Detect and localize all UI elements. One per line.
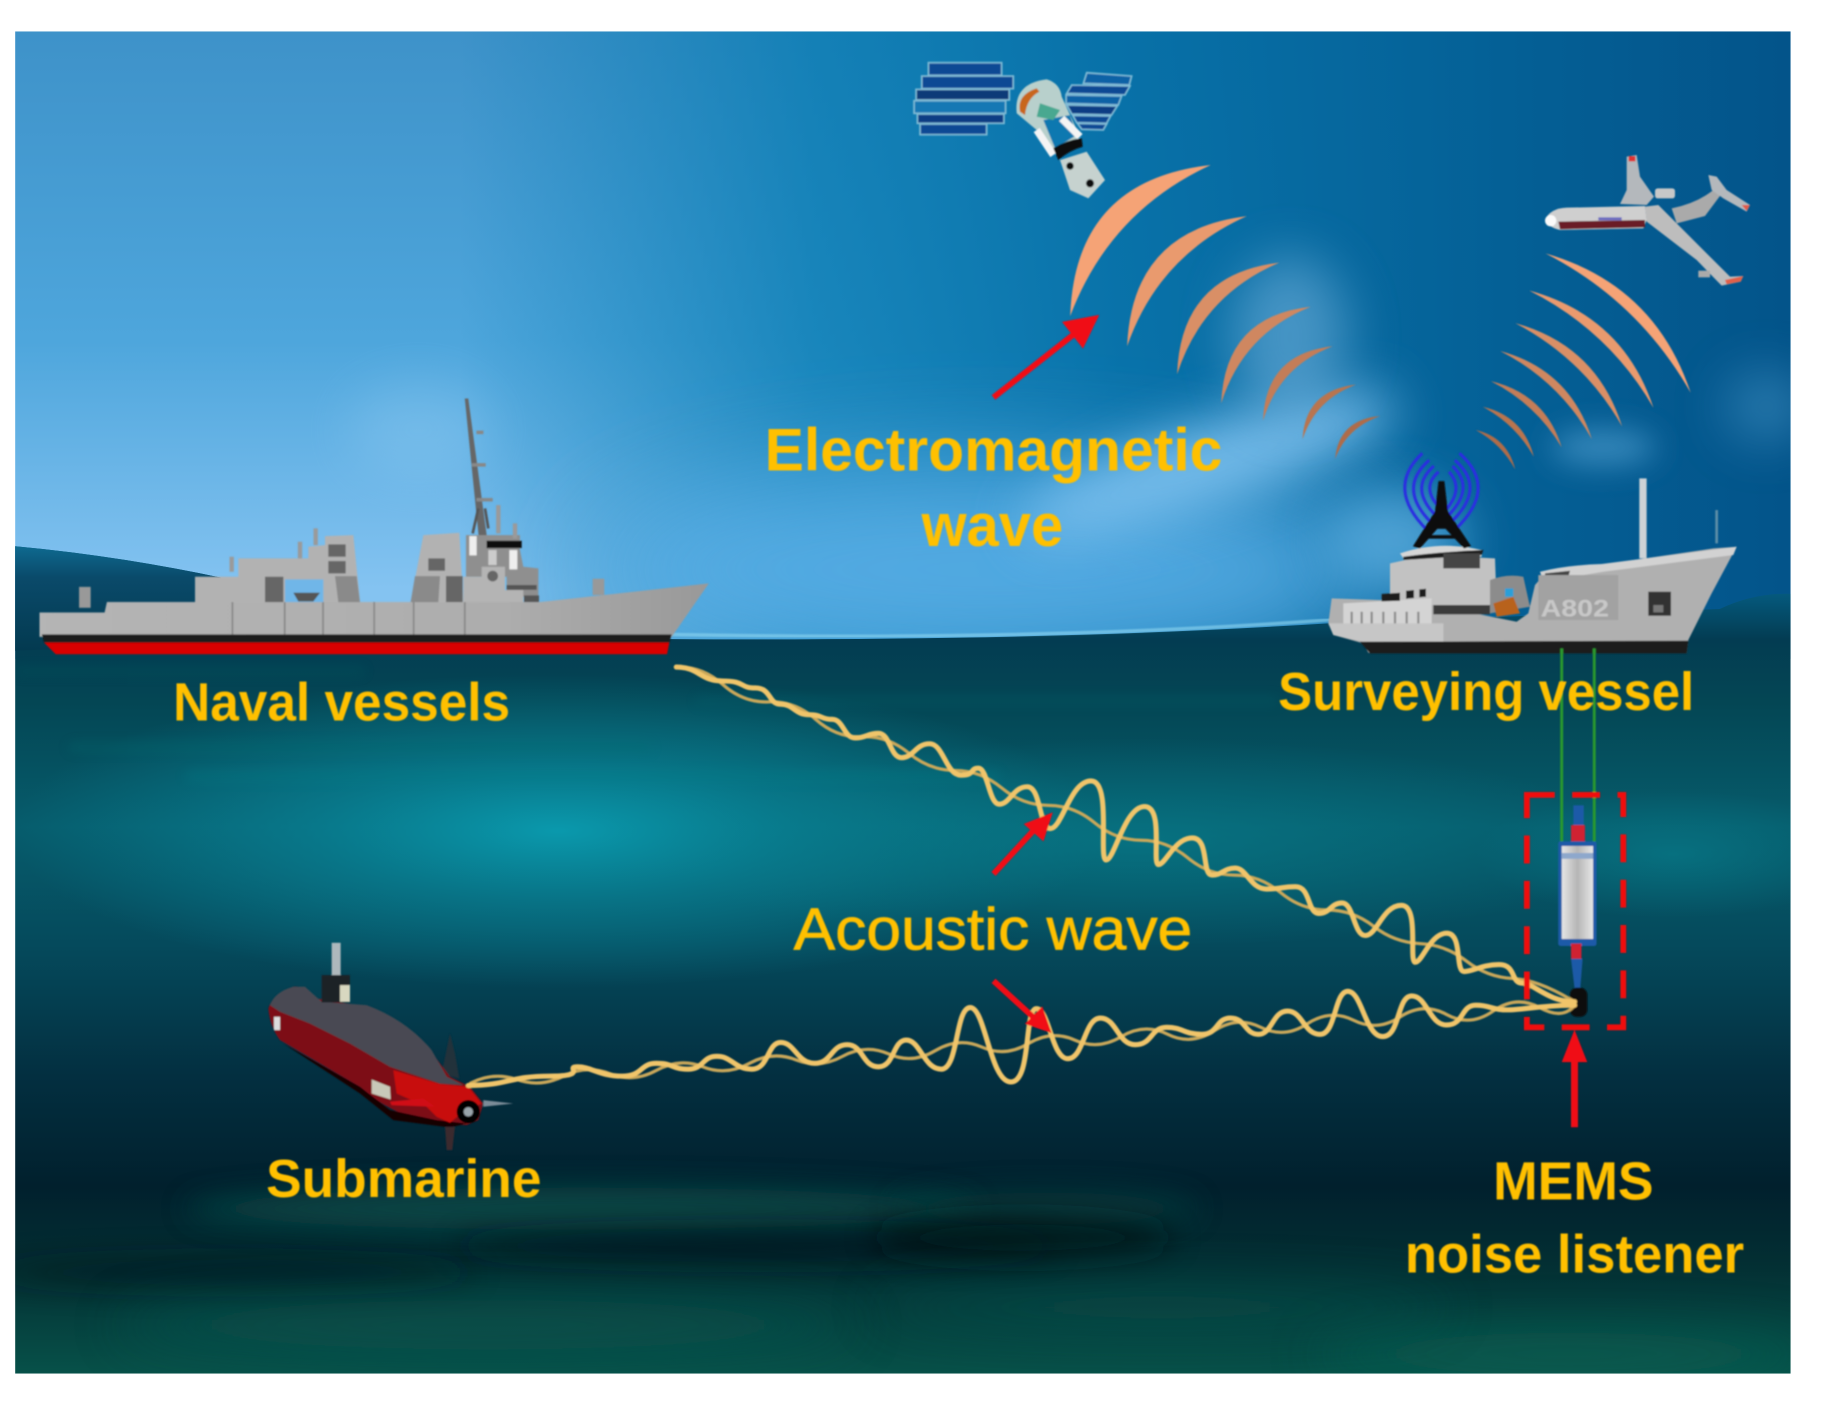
plane	[1545, 155, 1750, 286]
acoustic wave from naval vessel	[676, 667, 1574, 1002]
surveying vessel	[1328, 478, 1737, 653]
electromagnetic wave arcs from satellite	[1070, 165, 1380, 459]
red arrow: acoustic wave lower	[994, 981, 1052, 1033]
label: Electromagnetic wave: wave	[920, 491, 1063, 559]
acoustic wave from submarine	[468, 991, 1574, 1085]
naval vessel	[40, 399, 709, 654]
surveying vessel: A802	[1541, 596, 1609, 623]
naval vessel superstructure	[195, 505, 539, 602]
satellite	[914, 63, 1132, 198]
label: Electromagnetic wave	[765, 416, 1222, 559]
label: Submarine: Submarine	[266, 1150, 541, 1209]
background: seabed	[0, 1188, 1822, 1377]
label: MEMS noise listener	[1405, 1152, 1744, 1285]
dashed highlight box	[1527, 795, 1623, 1027]
background: sky	[15, 31, 1807, 674]
electromagnetic wave arcs to plane	[1476, 253, 1691, 469]
label: MEMS noise listener: MEMS	[1493, 1152, 1654, 1211]
red arrow: electromagnetic wave	[994, 315, 1099, 397]
label: Acoustic wave: Acoustic wave	[794, 895, 1192, 962]
antenna tower with blue signal arcs	[1405, 453, 1478, 549]
label: Electromagnetic wave: Electromagnetic	[765, 416, 1222, 484]
red arrow: MEMS noise listener	[1562, 1030, 1587, 1127]
label: MEMS noise listener: noise listener	[1405, 1226, 1744, 1285]
label: Naval vessels: Naval vessels	[173, 674, 510, 733]
red arrow: acoustic wave upper	[994, 812, 1053, 874]
background: sea	[12, 546, 1822, 1374]
submarine	[268, 943, 513, 1150]
MEMS noise listener device	[1558, 648, 1597, 1017]
label: Surveying vessel: Surveying vessel	[1278, 663, 1694, 722]
